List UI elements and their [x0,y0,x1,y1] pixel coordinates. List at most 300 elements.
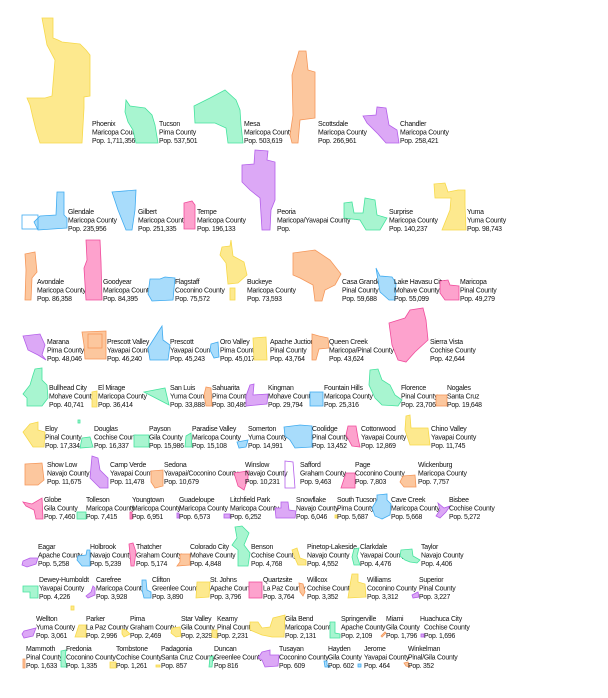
city: Gilbert: Pop. 251,335 [138,226,177,233]
city: Camp Verde: Pop. 11,478 [110,479,145,486]
city: Avondale: Avondale [37,279,64,286]
city: San Luis: San Luis [170,385,195,392]
city: Flagstaff: Flagstaff [175,279,199,286]
city: Youngtown [130,497,182,521]
city: Winslow: Navajo County [245,471,288,478]
city: Pima: Pima [130,616,145,623]
city: Star Valley: Star Valley [181,616,211,623]
city: Phoenix: Phoenix [92,121,115,128]
city: Holbrook: Navajo County [90,553,133,560]
city: Superior: Pinal County [419,586,456,593]
city: Miami: Gila County [386,625,420,632]
city: Wellton: Yuma County [36,625,76,632]
city: Eloy: Pop. 17,334 [45,443,80,450]
city: Peoria: Maricopa/Yavapai County [277,218,351,225]
city: Safford: Safford [300,462,321,469]
city: Willcox: Pop. 3,352 [307,594,339,601]
city: El Mirage [92,385,148,409]
city: Avondale: Maricopa County [37,288,87,295]
city: Mammoth: Pinal County [26,655,63,662]
city: Fountain Hills: Pop. 25,316 [324,402,359,409]
city: Sahuarita: Sahuarita [212,385,240,392]
city: Pima [122,616,177,640]
city: Scottsdale: Scottsdale [318,121,348,128]
city: Youngtown: Maricopa County [132,506,182,513]
city: Florence: Florence [401,385,426,392]
city: Tombstone: Tombstone [116,646,148,653]
city: Tucson: Pop. 537,501 [159,138,198,145]
city: Kingman: Mohave County [268,394,314,401]
city: Wellton [22,616,76,640]
city: Tombstone [110,646,162,670]
city: Somerton [237,426,288,450]
city: Buckeye [220,240,297,303]
city: Casa Grande: Pop. 59,688 [342,296,377,303]
city: Oro Valley: Pop. 45,017 [220,356,255,363]
city: Star Valley: Gila County [181,625,215,632]
city: Casa Grande [293,250,381,303]
city: Coolidge: Coolidge [312,426,337,433]
city: Apache Junction: Apache Juction [270,339,314,346]
city: Youngtown: Pop. 6,951 [132,514,164,521]
city: Duncan: Greenlee County [214,655,264,662]
city: Chandler: Pop. 258,421 [400,138,439,145]
city: Taylor: Taylor [421,544,438,551]
city: Wickenburg: Pop. 7,757 [418,479,450,486]
city: St. Johns: Pop. 3,796 [210,594,242,601]
city: Benson: Cochise County [251,553,297,560]
city: Tempe: Maricopa County [197,218,247,225]
city: Litchfield Park: Pop. 6,252 [230,514,262,521]
city: Pima: Pop. 2,469 [130,633,162,640]
city: Kearny: Kearny [217,616,238,623]
city: Quartzsite: Pop. 3,764 [263,594,295,601]
city: Kingman: Pop. 29,794 [268,402,303,409]
city: Carefree: Pop. 3,928 [96,594,128,601]
city: Springerville: Springerville [341,616,376,623]
city: Jerome: Jerome [364,646,386,653]
city: Cottonwood: Cottonwood [361,426,396,433]
city: Quartzsite: La Paz County [263,586,306,593]
city: Eloy [23,422,82,450]
city: Phoenix: Maricopa County [92,130,142,137]
city: Goodyear: Maricopa County [103,288,153,295]
city: Nogales: Nogales [447,385,471,392]
city: Camp Verde [90,456,156,488]
city: Tusayan: Pop. 609 [279,663,305,670]
city: Superior [412,577,456,601]
city: Tucson [125,100,198,145]
city: Pinetop-Lakeside: Navajo County [307,553,350,560]
city: Huachuca City [420,616,470,640]
city: Willcox: Cochise County [307,586,353,593]
city: St. Johns: Apache County [210,586,255,593]
city: Queen Creek: Pop. 43,624 [329,356,364,363]
city: Gila Bend: Maricopa County [285,625,335,632]
city: Thatcher [129,543,183,568]
city: Gila Bend: Gila Bend [285,616,313,623]
city: Tusayan [258,646,329,670]
city: Tucson: Tucson [159,121,180,128]
city: Colorado City: Mohave County [190,553,236,560]
city: Page [341,462,405,488]
city: Maricopa: Pinal County [460,288,497,295]
city: Maricopa: Pop. 49,279 [460,296,495,303]
city: Duncan: Pop 816 [214,663,239,670]
city: El Mirage: Pop. 36,414 [98,402,133,409]
city: Tempe: Pop. 196,133 [197,226,236,233]
city: Oro Valley: Pima County [220,348,258,355]
city: Florence: Pop. 23,706 [401,402,436,409]
city: Kingman: Kingman [268,385,294,392]
city: Bisbee: Pop. 5,272 [449,514,481,521]
city: Sierra Vista: Sierra Vista [430,339,463,346]
city: Parker [75,616,129,640]
city: Apache Junction: Pinal County [270,348,307,355]
city: Chino Valley: Pop. 11,745 [431,443,466,450]
city: Williams: Williams [367,577,391,584]
city: Prescott: Yavapai County [170,348,216,355]
city: Buckeye: Maricopa County [247,288,297,295]
city: Padagonia: Pop. 857 [161,663,187,670]
city: Oro Valley: Oro Valley [220,339,249,346]
city: Lake Havasu City: Lake Havasu City [394,279,444,286]
city: Flagstaff [148,277,225,303]
city: Marana [23,334,85,363]
city: Winkelman: Pop. 352 [408,663,434,670]
city: Bullhead City: Pop. 40,741 [49,402,84,409]
city: Globe: Gila County [44,506,78,513]
city: Prescott Valley [82,331,153,363]
city: Avondale [25,252,87,303]
city: Camp Verde: Yavapai County [110,471,156,478]
city: Fredonia: Pop. 1,335 [66,663,98,670]
city: Winkelman: Pinal/Gila County [408,655,458,662]
city: South Tucson: South Tucson [337,497,376,504]
city: Kingman [246,384,314,409]
city: Globe [23,497,78,521]
city: Mesa: Mesa [244,121,260,128]
city: Pinetop-Lakeside: Pop. 4,552 [307,561,339,568]
city: Clarkdale: Clarkdale [360,544,387,551]
city: San Luis: Yuma County [170,394,210,401]
city: Buckeye: Buckeye [247,279,272,286]
city: Wickenburg [400,462,468,487]
city: Winkelman: Winkelman [408,646,440,653]
city: Prescott: Prescott [170,339,194,346]
city: Wickenburg: Maricopa County [418,471,468,478]
city: Litchfield Park [224,497,280,521]
city: Yuma: Yuma [467,209,484,216]
city: Bisbee [436,497,495,521]
city: Marana: Pima County [47,348,85,355]
city: Taylor: Navajo County [421,553,464,560]
city: Paradise Valley: Maricopa County [192,435,242,442]
city: Oro Valley [210,339,258,363]
city: Goodyear: Pop. 84,395 [103,296,138,303]
city: Snowflake: Navajo County [296,506,339,513]
city: Taylor: Pop. 4,406 [421,561,453,568]
city: Prescott [148,326,216,363]
city: Somerton: Pop. 14,991 [248,443,283,450]
city: Surprise: Pop. 140,237 [389,226,428,233]
city: Bisbee: Cochise County [449,506,495,513]
city: Paradise Valley: Pop. 15,108 [192,443,227,450]
city: Gilbert [112,190,188,233]
city: Padagonia [156,646,216,670]
city: Star Valley: Pop. 2,329 [181,633,213,640]
city: Apache Junction [253,337,314,363]
city: Dewey-Humboldt: Dewey-Humboldt [39,577,89,584]
city: Fountain Hills: Fountain Hills [324,385,363,392]
city: Wellton: Wellton [36,616,57,623]
city: Huachuca City: Cochise County [424,625,470,632]
city: Glendale: Maricopa County [68,218,118,225]
city: Jerome: Yavapai County [364,655,410,662]
city: Tusayan: Tusayan [279,646,304,653]
city: Carefree [86,577,146,601]
city: Duncan [209,646,264,670]
city: Mammoth [23,646,63,670]
city: Eagar: Pop. 5,258 [38,561,70,568]
city: Chino Valley: Chino Valley [431,426,467,433]
city: Williams [348,574,417,601]
city: Snowflake: Pop. 6,046 [296,514,328,521]
city: Pima: Graham County [130,625,177,632]
city: Show Low: Navajo County [47,471,90,478]
city: Bullhead City: Bullhead City [49,385,87,392]
city: Kearny: Pinal County [217,625,254,632]
city: Clifton: Pop. 3,890 [152,594,184,601]
city: Sierra Vista: Cochise County [430,348,476,355]
city: Fountain Hills: Maricopa County [324,394,374,401]
city: Sahuarita [204,385,250,409]
city: Tusayan: Coconino County [279,655,329,662]
city: Tombstone: Pop. 1,261 [116,663,148,670]
city: Scottsdale: Pop. 266,961 [318,138,357,145]
city: Coolidge: Pinal County [312,435,349,442]
city: Flagstaff: Coconino County [175,288,225,295]
city: Queen Creek: Maricopa/Pinal County [329,348,394,355]
city: Douglas: Pop. 16,337 [94,443,129,450]
city: Clarkdale: Yavapai County [360,553,406,560]
city: Bullhead City [23,368,95,409]
city: Snowflake: Snowflake [296,497,326,504]
city: Payson: Gila County [149,435,183,442]
city: Gilbert: Maricopa County [138,218,188,225]
city: Eagar: Eagar [38,544,55,551]
city: Fredonia: Coconino County [66,655,116,662]
city: Winslow: Pop. 10,231 [245,479,280,486]
city: Chino Valley [405,415,477,450]
city: Chino Valley: Yavapai County [431,435,477,442]
city: Dewey-Humboldt [23,577,89,601]
city: Lake Havasu City: Pop. 55,099 [394,296,429,303]
city: Maricopa: Maricopa [460,279,487,286]
city: Thatcher: Thatcher [136,544,161,551]
city: Quartzsite [249,577,306,601]
city: Benson: Benson [251,544,273,551]
city: Surprise [344,198,439,233]
city: Coolidge [284,425,349,450]
city: Sedona: Yavapai/Coconino County [164,471,239,478]
city: Yuma [434,183,507,233]
city: Carefree: Maricopa County [96,586,146,593]
city: Cave Creek [372,494,441,521]
city: Thatcher: Graham County [136,553,183,560]
city: Sedona [151,462,239,488]
city: Paradise Valley: Paradise Valley [192,426,236,433]
city: Miami: Miami [386,616,403,623]
city: Carefree: Carefree [96,577,121,584]
city: Cave Creek: Pop. 5,668 [391,514,423,521]
city: Parker: La Paz County [86,625,129,632]
city: Benson: Pop. 4,768 [251,561,283,568]
city: Clarkdale: Pop. 4,476 [360,561,392,568]
city: Safford: Graham County [300,471,347,478]
city: Prescott Valley: Pop. 46,240 [107,356,142,363]
city: Casa Grande: Pinal County [342,288,379,295]
city: Bullhead City: Mohave County [49,394,95,401]
city: Douglas [78,420,140,450]
city: Huachuca City: Pop. 1,696 [424,633,456,640]
city: El Mirage: El Mirage [98,385,125,392]
city: Jerome: Pop. 464 [364,663,390,670]
city: Tolleson: Pop. 7,415 [86,514,118,521]
city: San Luis [144,385,210,409]
city: Show Low [25,462,90,486]
city: Scottsdale [290,51,368,145]
city: Chandler: Maricopa County [400,130,450,137]
city: Eloy: Eloy [45,426,58,433]
city: Marana: Marana [47,339,69,346]
city: Sierra Vista [389,308,476,363]
city: Scottsdale: Maricopa County [318,130,368,137]
city: Surprise: Surprise [389,209,413,216]
city: Hayden: Pop. 602 [328,663,354,670]
city: Cottonwood [346,426,407,450]
city: Quartzsite: Quartzsite [263,577,292,584]
city: South Tucson: Pima County [337,506,375,513]
city: Tempe [184,201,247,233]
city: Tempe: Tempe [197,209,217,216]
city: Springerville: Apache County [341,625,386,632]
city: St. Johns: St. Johns [210,577,237,584]
city: Wellton: Pop. 3,061 [36,633,68,640]
city: Yuma: Pop. 98,743 [467,226,502,233]
city: Chandler [363,107,450,145]
city: Fountain Hills [310,385,374,409]
city: Phoenix [27,18,142,145]
city: Page: Pop. 7,803 [355,479,387,486]
city: Padagonia: Padagonia [161,646,192,653]
city: Eagar [22,544,83,568]
city: Tolleson [77,497,136,521]
city: Holbrook [77,544,133,568]
city: Coolidge: Pop. 13,452 [312,443,347,450]
city: Gilbert: Gilbert [138,209,157,216]
city: Mammoth: Mammoth [26,646,55,653]
city: Clarkdale [352,544,406,568]
city: Tombstone: Cochise County [116,655,162,662]
city: Litchfield Park: Litchfield Park [230,497,270,504]
city: Eagar: Apache County [38,553,83,560]
city: Parker: Pop. 2,996 [86,633,118,640]
city: Superior: Pop. 3,227 [419,594,451,601]
city: Show Low: Show Low [47,462,77,469]
city: Show Low: Pop. 11,675 [47,479,82,486]
city: Avondale: Pop. 86,358 [37,296,72,303]
city: Jerome [358,646,410,670]
city: Gila Bend [250,615,335,640]
city: Nogales [436,385,482,409]
city: Snowflake [275,497,339,521]
city: Prescott Valley: Yavapai County [107,348,153,355]
city: Kearny [212,616,254,640]
city: Tolleson: Tolleson [86,497,110,504]
city: Phoenix: Pop. 1,711,356 [92,138,136,145]
city: Surprise: Maricopa County [389,218,439,225]
city: Youngtown: Youngtown [132,497,164,504]
city: Cave Creek: Maricopa County [391,506,441,513]
city: Apache Junction: Pop. 43,764 [270,356,305,363]
city: Hayden [324,646,362,670]
city: Clifton: Greenlee County [152,586,202,593]
city: Goodyear: Goodyear [103,279,132,286]
city: Sahuarita: Pop. 30,486 [212,402,247,409]
city: Payson: Pop. 15,986 [149,443,184,450]
city: Tucson: Pima County [159,130,197,137]
city: Holbrook: Pop. 5,239 [90,561,122,568]
city: Superior: Superior [419,577,443,584]
city: Nogales: Pop. 19,648 [447,402,482,409]
city: Fredonia: Fredonia [66,646,91,653]
city: Gila Bend: Pop. 2,131 [285,633,317,640]
city: Yuma: Yuma County [467,218,507,225]
city: Pinetop-Lakeside [292,544,357,568]
city: Kearny: Pop. 2,231 [217,633,249,640]
city: Sahuarita: Pima County [212,394,250,401]
city: Williams: Coconino County [367,586,417,593]
city: Winslow: Winslow [245,462,269,469]
city: Benson [232,526,297,568]
city: Queen Creek: Queen Creek [329,339,368,346]
city: Somerton: Yuma County [248,435,288,442]
city: Paradise Valley [185,426,242,450]
city: Wickenburg: Wickenburg [418,462,452,469]
city: Page: Coconino County [355,471,405,478]
city: Clifton: Clifton [152,577,170,584]
city: Litchfield Park: Maricopa County [230,506,280,513]
city: Globe: Globe [44,497,61,504]
city: Taylor [400,544,464,568]
city: Cottonwood: Yavapai County [361,435,407,442]
city: San Luis: Pop. 33,888 [170,402,205,409]
city: Globe: Pop. 7,460 [44,514,76,521]
city: Douglas: Douglas [94,426,118,433]
city: Parker: Parker [86,616,105,623]
city: Hayden: Gila County [328,655,362,662]
city: Guadeloupe: Pop. 6,573 [179,514,211,521]
city: Mammoth: Pop. 1,633 [26,663,58,670]
city: Florence [369,369,438,409]
city: Glendale: Glendale [68,209,94,216]
city: Somerton: Somerton [248,426,276,433]
city: Guadeloupe: Guadeloupe [179,497,214,504]
city: Lake Havasu City [376,268,445,303]
city: Florence: Pinal County [401,394,438,401]
city: Nogales: Santa Cruz [447,394,480,401]
